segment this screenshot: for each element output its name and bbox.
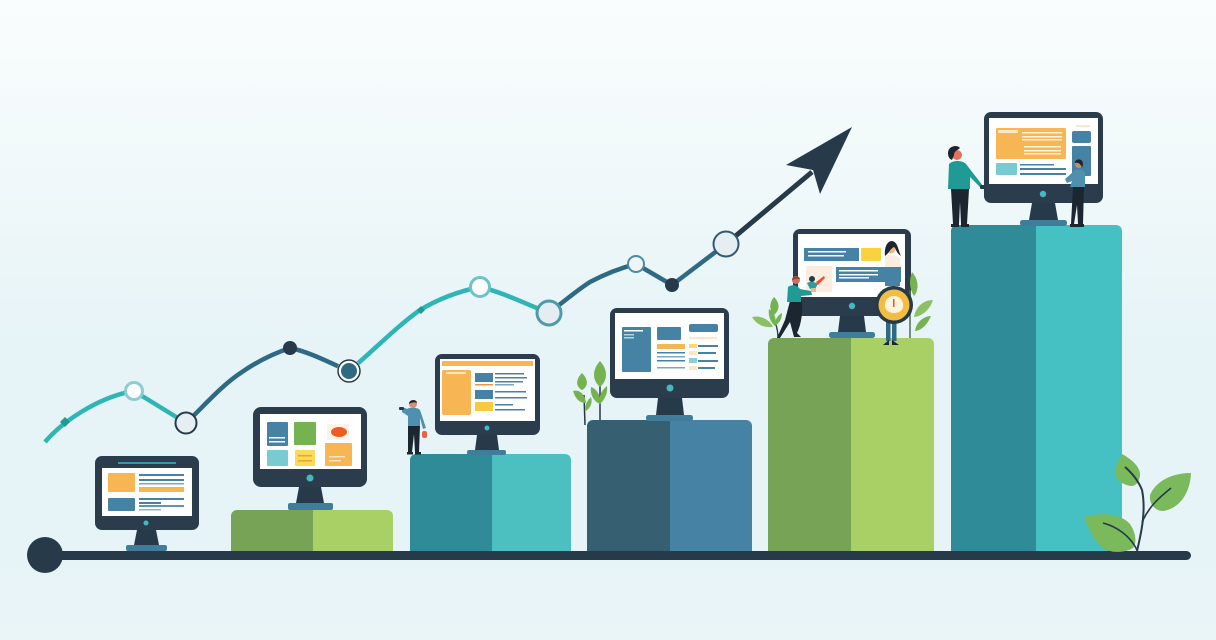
person right of monitor 6 — [1065, 159, 1085, 227]
monitor 6 — [984, 112, 1103, 226]
person on bar 3 — [399, 400, 427, 454]
bar 2: green step — [231, 510, 393, 551]
bar 5: green step — [768, 338, 934, 551]
plants on bar 5 — [752, 272, 933, 338]
plants on bar 4 — [573, 361, 607, 425]
bar 6: teal step — [951, 225, 1122, 551]
growth line with arrow — [45, 127, 852, 442]
bar 4: blue step — [587, 420, 752, 551]
woman on monitor 5 — [883, 241, 901, 345]
monitor 2 — [253, 407, 367, 510]
person left of monitor 6 — [948, 146, 985, 227]
monitor 4 — [610, 308, 729, 421]
small figure on monitor 5 — [807, 276, 825, 292]
bar 3: teal step — [410, 454, 571, 551]
monitor 1 — [95, 456, 199, 551]
large plant — [1084, 454, 1191, 552]
line nodes — [126, 232, 738, 434]
badge: gauge — [875, 286, 913, 324]
person pointing at monitor 5 — [777, 276, 812, 338]
monitor 5 — [793, 229, 911, 338]
monitor 3 — [435, 354, 540, 455]
baseline axis — [27, 537, 1191, 573]
